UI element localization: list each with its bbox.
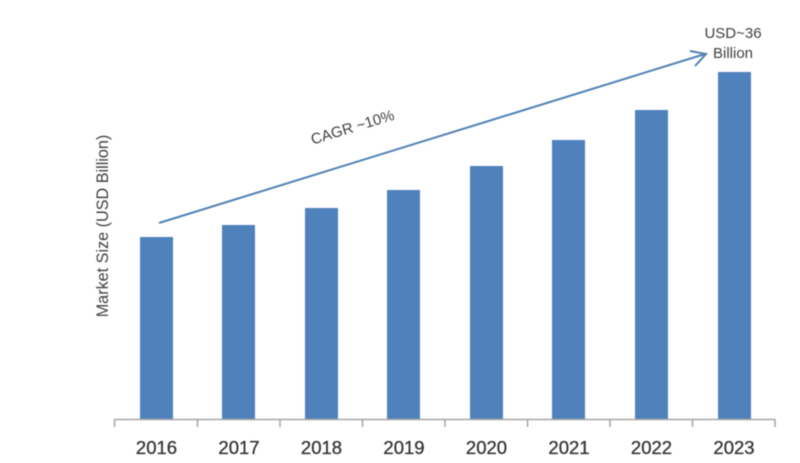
growth arrow — [159, 51, 706, 223]
x-axis year labels: 2021 — [548, 437, 590, 458]
x-axis year labels: 2023 — [713, 437, 755, 458]
x-axis year labels: 2019 — [383, 437, 425, 458]
end value callout: USD~36 — [704, 25, 762, 42]
x-axis year labels: 2022 — [631, 437, 672, 458]
bars — [140, 72, 751, 419]
x-axis year labels: 2016 — [136, 437, 177, 458]
end value callout: Billion — [713, 45, 753, 62]
x-axis year labels: 2020 — [466, 437, 507, 458]
x-axis year labels: 2018 — [301, 437, 342, 458]
y-axis title: Market Size (USD Billion) — [94, 135, 112, 317]
CAGR label: CAGR ~10% — [309, 107, 396, 148]
end value callout — [704, 25, 762, 62]
x-axis year labels: 2017 — [218, 437, 260, 458]
x axis — [114, 419, 775, 427]
x-axis year labels — [136, 437, 755, 458]
